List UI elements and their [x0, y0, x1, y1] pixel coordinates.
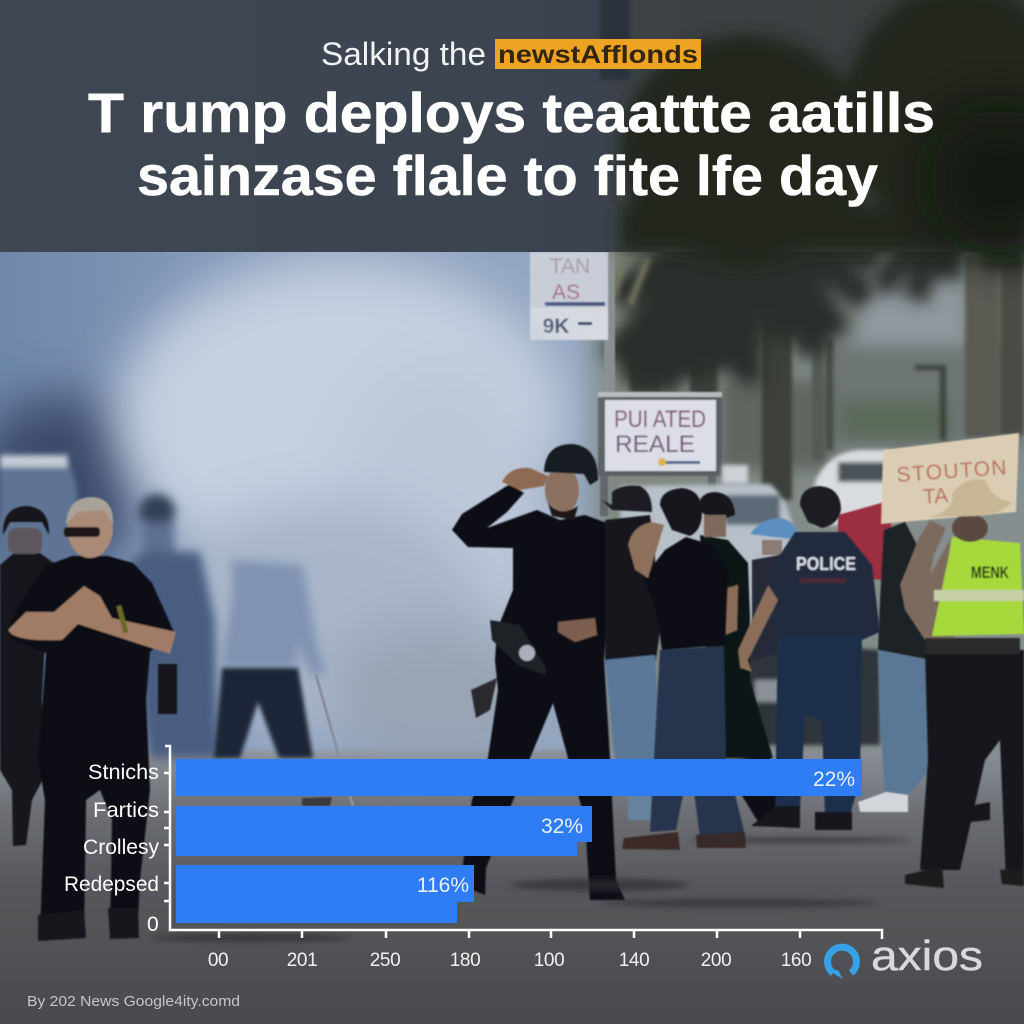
value axis labels: 140 [619, 950, 649, 971]
value axis labels: 200 [701, 950, 731, 971]
parked cars [620, 450, 890, 745]
protest placard: STOUTON [896, 456, 1007, 487]
sign: PUI ATED REALE: PUI ATED [614, 406, 706, 433]
smoke cloud [115, 260, 565, 760]
highlighted tag: newstAfflonds [498, 41, 698, 69]
officer in black shirt and jeans [622, 488, 746, 850]
distant buildings [720, 270, 1024, 470]
protest placard [881, 433, 1019, 524]
sign: PUI ATED REALE [598, 392, 722, 516]
red banner [838, 500, 892, 580]
central officer saluting [452, 444, 643, 900]
axios logo: axios [871, 932, 983, 979]
sign: PUI ATED REALE: REALE [615, 431, 695, 458]
palm fronds in header [620, 0, 1024, 265]
street sign: 9K [543, 315, 569, 338]
subtitle: Salking the [321, 36, 486, 72]
dark building column at top [600, 0, 630, 80]
bar: Stnichs [176, 759, 862, 796]
bar: Fartics / Crollesy [176, 806, 592, 856]
protest placard: TA [922, 484, 949, 509]
left dark haze [0, 395, 145, 565]
bar: Fartics / Crollesy: 32% [541, 815, 583, 838]
category labels [64, 761, 159, 936]
palm trees [612, 180, 1024, 500]
category labels: Redepsed [64, 873, 159, 896]
street sign [530, 252, 615, 402]
bar: Redepsed [176, 865, 474, 923]
officer in green safety vest and hat: MENK [971, 563, 1010, 582]
value axis labels: 00 [208, 950, 228, 971]
category labels: Crollesy [83, 836, 159, 859]
officer with POLICE vest from behind [738, 486, 880, 830]
headline: sainzase flale to fite lfe day [137, 144, 878, 207]
value axis labels: 250 [370, 950, 400, 971]
source credit: By 202 News Google4ity.comd [27, 993, 240, 1010]
headline [88, 81, 935, 207]
axes [164, 746, 882, 939]
bar: Stnichs: 22% [813, 768, 855, 791]
category labels: Stnichs [88, 761, 159, 784]
category labels: Fartics [93, 799, 159, 822]
bar: Redepsed: 116% [417, 874, 469, 897]
value axis labels: 201 [287, 950, 317, 971]
officer with POLICE vest from behind: POLICE [796, 554, 856, 574]
icon: ring mark [828, 947, 856, 979]
hazy officer with baton [214, 560, 353, 806]
headline: T rump deploys teaattte aatills [88, 81, 935, 144]
value axis labels [208, 950, 811, 971]
axios logo [828, 932, 983, 979]
officer in helmet, back left [0, 506, 58, 846]
street sign: TAN [550, 255, 590, 278]
value axis labels: 100 [534, 950, 564, 971]
street sign: AS [552, 281, 580, 304]
subtitle [321, 36, 701, 72]
hazy officer behind smoke [122, 494, 218, 758]
officer in green safety vest and hat [900, 479, 1024, 888]
category labels: 0 [147, 913, 159, 936]
protester in jeans [858, 522, 990, 824]
value axis labels: 180 [450, 950, 480, 971]
ground [0, 750, 1024, 1024]
horizontal bar chart [64, 746, 882, 971]
front officer in sunglasses [8, 497, 177, 941]
header band [0, 0, 1024, 265]
group of officers in background [602, 486, 800, 825]
value axis labels: 160 [781, 950, 811, 971]
distant van at left [0, 455, 80, 570]
ground shadows [150, 837, 910, 942]
